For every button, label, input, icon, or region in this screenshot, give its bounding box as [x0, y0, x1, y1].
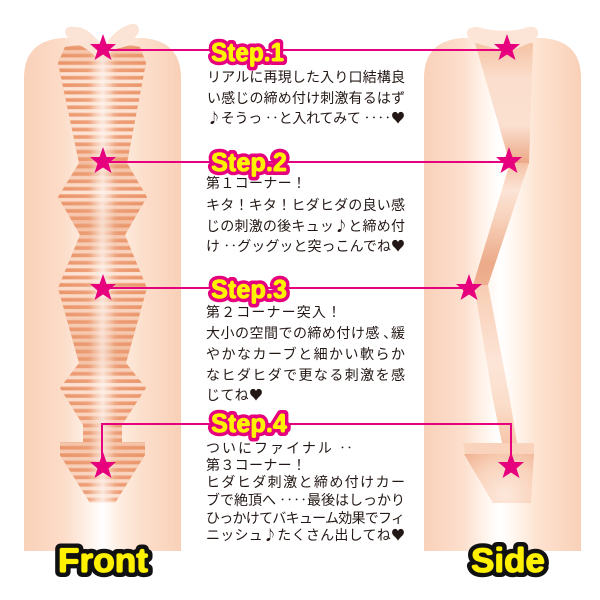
star side 2: [496, 147, 522, 173]
heading: Step.4: Step.4: [211, 408, 288, 438]
label: Side: Side: [471, 542, 545, 580]
side body: [424, 38, 581, 551]
star front 2: [90, 147, 116, 173]
front lips: [65, 24, 139, 58]
text block: step 2: キタ！キタ！ヒダヒダの良い感: [206, 195, 405, 215]
text block: step 4: ひっかけてバキューム効果でフィ: [206, 508, 405, 528]
text block: step 2: [206, 173, 405, 256]
text block: step 3: なヒダヒダで更なる刺激を感: [206, 365, 405, 385]
text block: step 4: [206, 438, 405, 545]
star side 1: [494, 34, 520, 60]
star side 3: [456, 274, 482, 300]
label: Front: Front: [58, 542, 148, 580]
text block: step 4: ヒダヒダ刺激と締め付けカー: [206, 472, 405, 492]
panel: side view: [424, 27, 581, 551]
text block: step 1: い感じの締め付け刺激有るはず: [207, 88, 405, 108]
side lips: [467, 27, 538, 53]
star markers: [90, 34, 524, 478]
side canal lower segment: [474, 285, 517, 443]
heading: Step.2: Step.2: [211, 147, 287, 177]
heading: Step.1: Step.1: [211, 37, 284, 67]
text block: step 2: け ‥グッグッと突っこんでね♥: [206, 236, 405, 256]
heading: Step.3: Step.3: [211, 274, 287, 304]
text block: step 1: ♪そうっ ‥と入れてみて ‥‥♥: [207, 108, 405, 128]
text block: step 4: ブで絶頂へ ‥‥最後はしっかり: [206, 490, 405, 510]
star front 4: [90, 452, 116, 478]
text block: step 4: ニッシュ♪たくさん出してね♥: [206, 525, 405, 545]
front body: [24, 38, 181, 551]
text block: step 3: じてね♥: [206, 385, 263, 405]
side canal upper segment: [475, 43, 533, 164]
text block: step 3: [206, 302, 405, 405]
panel: front view: [24, 24, 181, 551]
front inner canal: [58, 45, 147, 503]
text block: step 3: 第２コーナー突入！: [206, 302, 341, 322]
side base band: [463, 443, 534, 454]
text block: step 3: やかなカーブと細かい軟らか: [206, 344, 405, 364]
text block: step 2: 第１コーナー！: [206, 173, 306, 193]
text block: step 1: リアルに再現した入り口結構良: [207, 67, 405, 87]
text block: step 1: [207, 67, 405, 128]
star side 4: [498, 452, 524, 478]
connector lines: [102, 50, 511, 466]
side base cup: [464, 454, 534, 503]
star front 1: [90, 34, 116, 60]
text block: step 4: ついにファイナル ‥: [206, 438, 353, 458]
star front 3: [90, 274, 116, 300]
text block: step 2: じの刺激の後キュッ♪と締め付: [206, 216, 405, 236]
text block: step 4: 第３コーナー！: [206, 455, 306, 475]
text block: step 3: 大小の空間での締め付け感 ､緩: [206, 323, 405, 343]
side canal middle segment: [473, 163, 529, 285]
